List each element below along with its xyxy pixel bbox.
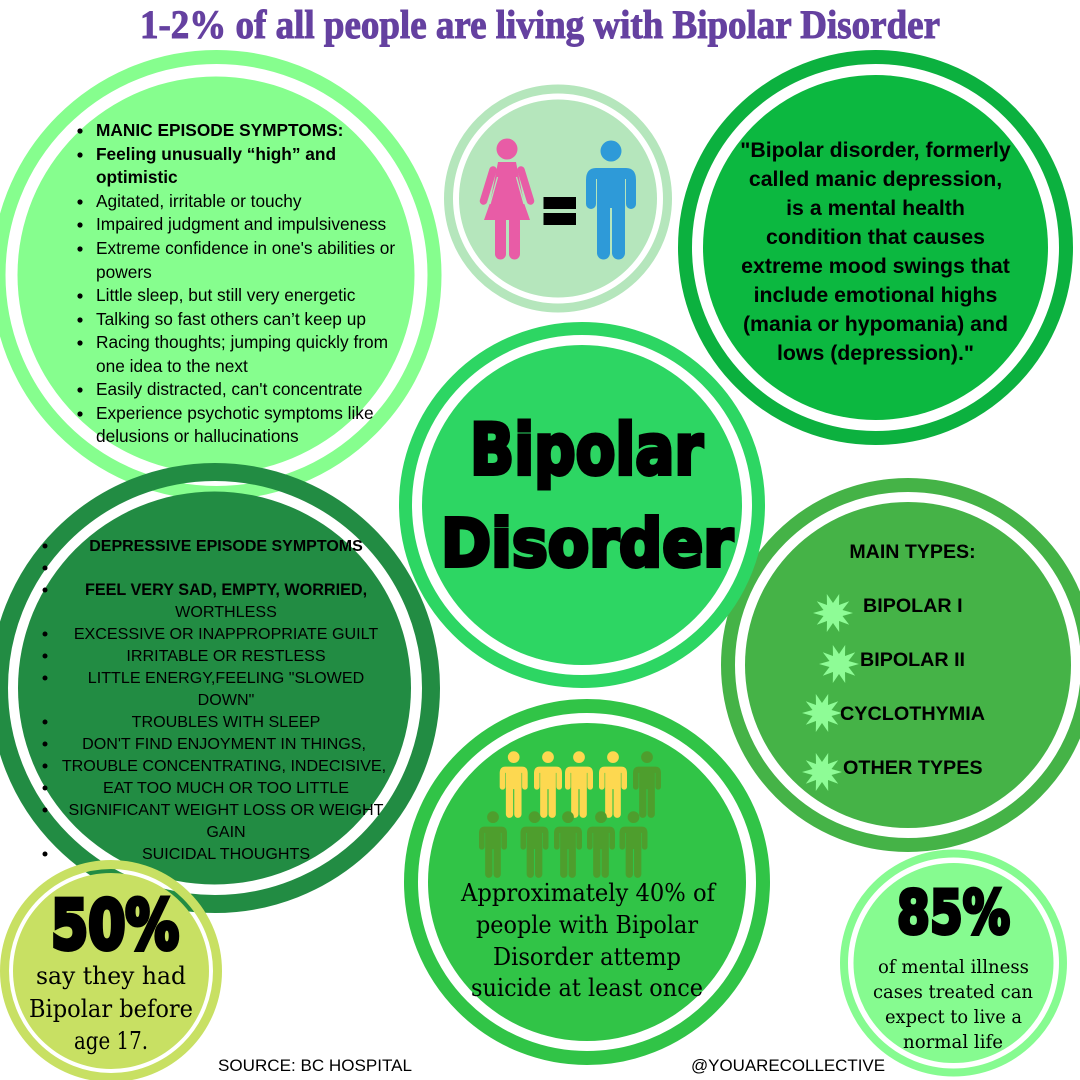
- heading: Bipolar Disorder: Bipolar: [470, 409, 703, 491]
- icon: man: [586, 140, 636, 260]
- statistic text: Bipolar before: [29, 995, 193, 1023]
- quote text: lows (depression).": [777, 341, 974, 365]
- panel: manic episode symptoms: [0, 57, 434, 493]
- depressive symptom list: IRRITABLE OR RESTLESS: [126, 647, 326, 665]
- manic symptom list: delusions or hallucinations: [96, 426, 299, 446]
- manic symptom list: Little sleep, but still very energetic: [96, 285, 356, 305]
- depressive symptom list: DEPRESSIVE EPISODE SYMPTOMS: [89, 538, 363, 555]
- depressive symptom list: EAT TOO MUCH OR TOO LITTLE: [103, 779, 349, 797]
- type: bipolar II: [819, 645, 965, 683]
- panel: depressive episode symptoms: [0, 472, 431, 904]
- statistic text: [460, 879, 717, 1002]
- source credit: SOURCE: BC HOSPITAL: [218, 1056, 412, 1075]
- type: bipolar II: BIPOLAR II: [860, 649, 965, 671]
- depressive symptom list: LITTLE ENERGY,FEELING "SLOWED: [88, 669, 364, 687]
- icon: woman: [484, 138, 530, 260]
- depressive symptom list: WORTHLESS: [175, 603, 277, 621]
- depressive symptom list: DOWN": [198, 691, 255, 709]
- manic symptom list: MANIC EPISODE SYMPTOMS:: [96, 120, 343, 140]
- panel: central bipolar disorder: [406, 328, 758, 682]
- depressive symptom list: EXCESSIVE OR INAPPROPRIATE GUILT: [74, 625, 378, 643]
- quote text: is a mental health: [786, 196, 965, 220]
- manic symptom list: Impaired judgment and impulsiveness: [96, 214, 386, 234]
- depressive symptom list: GAIN: [206, 823, 246, 841]
- quote text: [740, 138, 1011, 365]
- depressive symptom list: [42, 538, 386, 863]
- depressive symptom list: DON'T FIND ENJOYMENT IN THINGS,: [82, 735, 366, 753]
- depressive symptom list: SUICIDAL THOUGHTS: [142, 845, 310, 863]
- type: other types: [802, 753, 983, 791]
- main types heading: MAIN TYPES:: [849, 541, 976, 563]
- manic symptom list: Easily distracted, can't concentrate: [96, 379, 362, 399]
- statistic text: of mental illness: [878, 956, 1029, 978]
- panel: 40 percent suicide attempts: [411, 706, 763, 1058]
- manic symptom list: optimistic: [96, 167, 178, 187]
- statistic text: normal life: [903, 1031, 1003, 1053]
- statistic text: Disorder attemp: [493, 943, 681, 971]
- icon: equals sign: [544, 197, 576, 225]
- pictogram: yellow and green people: [479, 751, 661, 878]
- statistic text: expect to live a: [885, 1006, 1022, 1028]
- manic symptom list: Feeling unusually “high” and: [96, 144, 336, 164]
- type: cyclothymia: CYCLOTHYMIA: [840, 703, 985, 725]
- title: 1-2% of all people are living with Bipolar Disorder: [140, 2, 940, 47]
- statistic text: people with Bipolar: [476, 911, 698, 939]
- author handle: @YOUARECOLLECTIVE: [691, 1056, 885, 1075]
- quote text: "Bipolar disorder, formerly: [740, 138, 1011, 162]
- type: cyclothymia: [802, 694, 985, 732]
- type: bipolar I: BIPOLAR I: [863, 595, 963, 617]
- statistic text: suicide at least once: [471, 974, 703, 1002]
- manic symptom list: Extreme confidence in one's abilities or: [96, 238, 395, 258]
- quote text: include emotional highs: [754, 283, 997, 307]
- type: other types: OTHER TYPES: [843, 757, 983, 779]
- number: 50%: 50%: [51, 886, 179, 966]
- statistic text: Approximately 40% of: [460, 879, 717, 907]
- manic symptom list: powers: [96, 262, 152, 282]
- panel: definition quote: [685, 57, 1066, 438]
- statistic text: [873, 956, 1033, 1053]
- statistic text: [29, 962, 193, 1055]
- panel: main types: [728, 485, 1080, 845]
- type: bipolar I: [813, 594, 963, 632]
- panel: 85 percent live normal life: [844, 854, 1063, 1072]
- quote text: condition that causes: [766, 225, 985, 249]
- panel: gender equality: [448, 89, 668, 308]
- manic symptom list: [77, 120, 395, 446]
- statistic text: age 17.: [74, 1027, 148, 1055]
- manic symptom list: Racing thoughts; jumping quickly from: [96, 332, 388, 352]
- depressive symptom list: SIGNIFICANT WEIGHT LOSS OR WEIGHT: [68, 801, 384, 819]
- heading: Bipolar Disorder: Disorder: [441, 505, 733, 582]
- panel: 50 percent before age 17: [4, 864, 218, 1078]
- manic symptom list: Experience psychotic symptoms like: [96, 403, 374, 423]
- quote text: called manic depression,: [749, 167, 1002, 191]
- heading: Bipolar Disorder: [441, 409, 733, 582]
- depressive symptom list: FEEL VERY SAD, EMPTY, WORRIED,: [85, 581, 367, 599]
- quote text: (mania or hypomania) and: [743, 312, 1008, 336]
- manic symptom list: one idea to the next: [96, 356, 248, 376]
- depressive symptom list: TROUBLES WITH SLEEP: [132, 713, 320, 731]
- statistic text: cases treated can: [873, 981, 1033, 1003]
- manic symptom list: Talking so fast others can’t keep up: [96, 309, 366, 329]
- number: 85%: 85%: [897, 878, 1010, 948]
- quote text: extreme mood swings that: [741, 254, 1010, 278]
- statistic text: say they had: [36, 962, 186, 990]
- depressive symptom list: TROUBLE CONCENTRATING, INDECISIVE,: [62, 757, 386, 775]
- manic symptom list: Agitated, irritable or touchy: [96, 191, 302, 211]
